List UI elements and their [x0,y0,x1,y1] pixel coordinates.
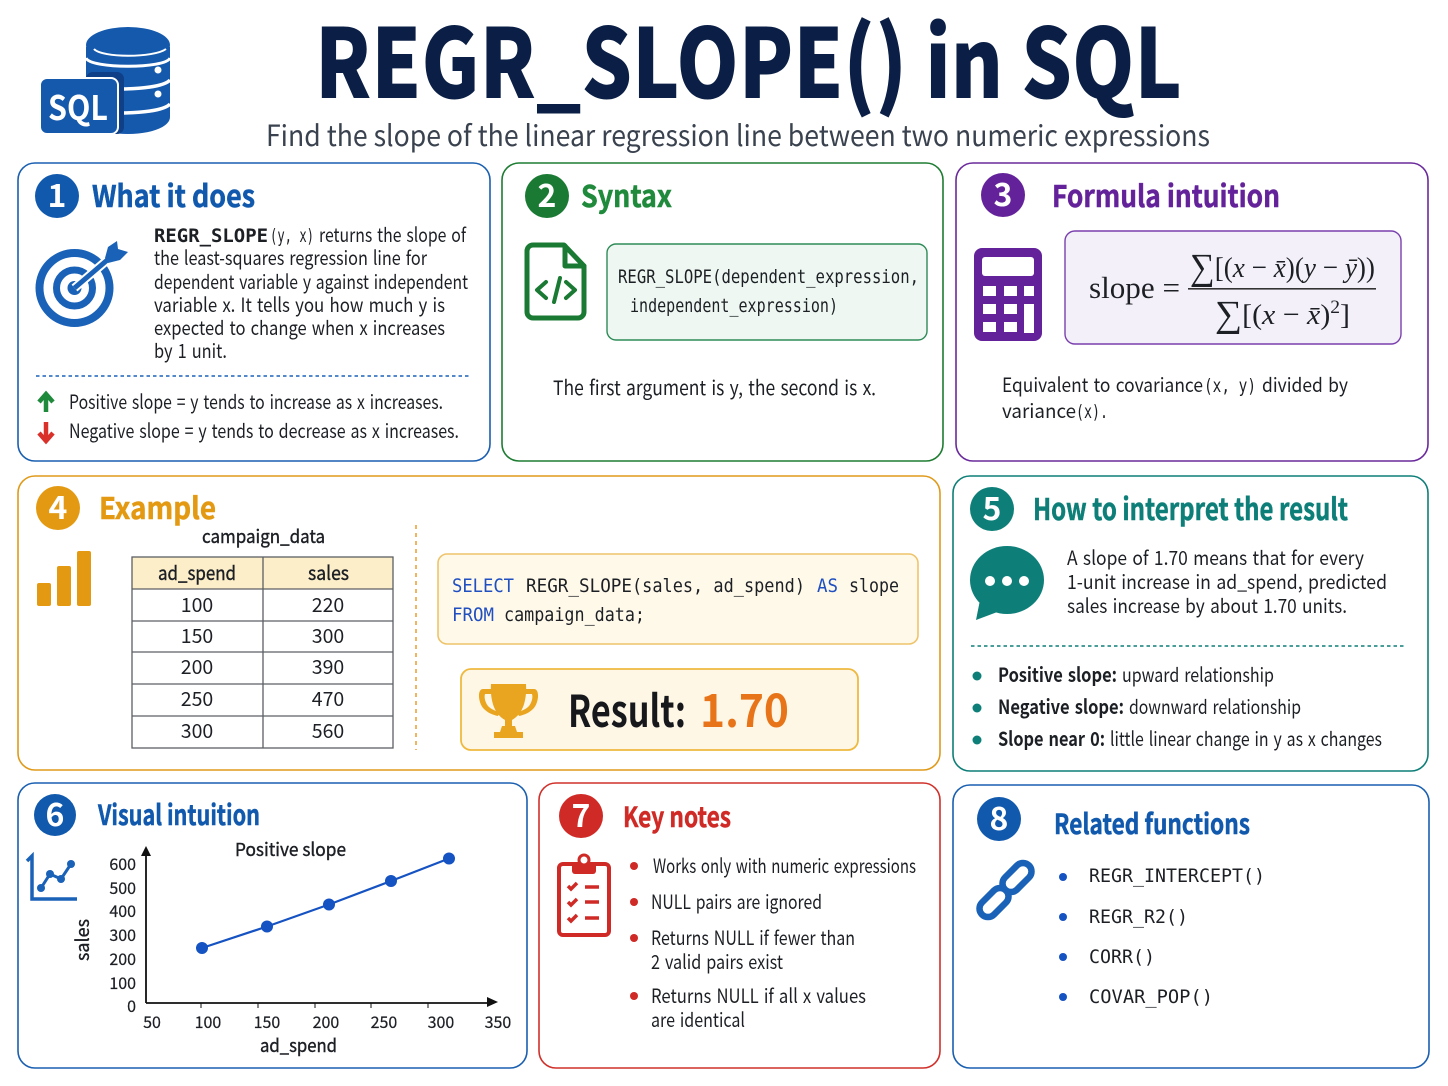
formula caption: (x). [1076,401,1108,423]
panel: Formula intuition [956,163,1428,461]
number badge 4 [36,483,80,530]
heading: Example: Example [99,484,216,528]
formula box: 2 [1330,297,1340,318]
subtitle: Find the slope of the linear regression line between two numeric expressions [266,113,1210,155]
interpretation text: A slope of 1.70 means that for every [1067,542,1364,571]
formula box: x − x̄) [1262,299,1330,331]
heading: Related functions: Related functions [1054,803,1250,843]
y axis labels: 300 [109,922,136,946]
code box: example query: (sales, ad_spend) [632,575,805,597]
bullet list: notes: Returns NULL if fewer than [651,922,855,951]
data series [196,852,455,954]
formula caption: variance [1002,395,1076,424]
interpretation text: sales increase by about 1.70 units. [1067,590,1347,619]
formula box: ] [1340,299,1350,331]
code box: example query: campaign_data; [504,604,645,626]
bullet list: notes: are identical [651,1004,745,1033]
panel: Visual intuition [18,783,527,1068]
code box: example query: slope [849,575,899,597]
number badge 3: 3 [994,170,1012,216]
panel: What it does [18,163,490,461]
x axis labels: 50 [143,1009,161,1033]
data table: 250 [181,683,213,712]
number badge 6: 6 [46,790,64,836]
table title: campaign_data [202,523,325,549]
bullet list: slope meanings: downward relationship [1129,691,1301,720]
formula box: [( [1215,252,1233,284]
icon: SQL database [40,27,170,134]
y axis labels: 100 [109,970,136,994]
code box: syntax: REGR_SLOPE(dependent_expression, [618,266,919,288]
formula box: ∑ [1215,294,1242,335]
bullet list: notes: NULL pairs are ignored [651,886,822,915]
x axis labels: 100 [195,1009,221,1033]
negative slope text: Negative slope = y tends to decrease as x increases. [69,415,459,444]
number badge 7 [559,791,603,838]
icon: checklist clipboard [559,855,609,935]
heading: Formula intuition: Formula intuition [1052,172,1280,216]
heading: Syntax: Syntax [581,172,672,216]
heading: What it does: What it does [92,172,255,216]
heading: Key notes: Key notes [623,796,731,836]
x axis labels: 300 [428,1009,454,1033]
code box: example query: FROM [452,604,494,626]
code box: syntax [607,244,927,340]
code box: example query: SELECT [452,575,514,597]
description text: REGR_SLOPE [154,225,268,247]
bullet list: slope meanings: Negative slope: [998,691,1124,720]
number badge 5 [970,484,1014,531]
code box: example query: REGR_SLOPE [526,575,632,597]
bullet list: slope meanings: upward relationship [1122,659,1274,688]
panel: How to interpret the result [953,476,1428,771]
heading: Visual intuition: Visual intuition [97,794,260,834]
function list: COVAR_POP() [1089,986,1213,1008]
bullet list: notes: Returns NULL if all x values [651,980,866,1009]
x axis labels: 150 [254,1009,280,1033]
formula box: [( [1242,299,1262,331]
formula box [1065,231,1401,344]
icon: trophy [479,684,538,738]
icon: SQL database: SQL [48,81,108,130]
data table: 100 [181,589,213,618]
y axis labels: 200 [109,946,136,970]
icon: speech bubble [970,546,1044,620]
data table: 200 [181,651,213,680]
icon: green up arrow [39,394,53,412]
formula box: slope = [1089,270,1180,305]
x axis labels: 350 [485,1009,511,1033]
description text [154,219,469,364]
function list [1059,865,1265,1008]
y axis labels: 0 [127,993,136,1017]
bullet list: notes: 2 valid pairs exist [651,946,784,975]
data table [132,557,393,748]
number badge 1: 1 [48,171,66,217]
x axis labels: 250 [371,1009,397,1033]
code box: example query: AS [817,575,838,597]
x axis title: ad_spend [260,1032,337,1058]
y axis labels: 500 [109,875,136,899]
data table: 470 [312,683,344,712]
panel: Key notes [539,783,940,1068]
bullet list: slope meanings: little linear change in y as x changes [1110,723,1382,752]
number badge 4: 4 [49,483,67,529]
y axis labels: 600 [109,851,136,875]
description text: (y, x) [270,225,314,247]
panel: Example [18,476,940,770]
icon: target with arrow [40,241,128,323]
data table: 390 [312,651,344,680]
scatter line chart [69,836,511,1058]
icon: chain link [976,859,1035,921]
code box: example query [438,554,918,644]
y axis labels [109,851,136,1017]
bullet list: notes [630,850,916,1033]
icon: red down arrow [39,422,53,441]
syntax caption: The first argument is y, the second is x. [553,372,876,401]
icon: code file [527,245,584,318]
interpretation text: 1-unit increase in ad_spend, predicted [1067,566,1387,595]
number badge 1 [35,171,79,218]
chart title: Positive slope [235,836,346,862]
interpretation text [1067,542,1387,619]
x axis labels [143,1009,511,1033]
result box [461,669,858,750]
panel: Syntax [502,163,943,461]
bullet list: slope meanings: Slope near 0: [998,723,1105,752]
number badge 6 [34,790,76,836]
y axis labels: 400 [109,898,136,922]
bullet list: notes: Works only with numeric expressions [653,850,916,879]
number badge 2 [525,171,569,218]
icon: calculator [974,248,1042,341]
data table: 300 [181,715,213,744]
data table: 220 [312,589,344,618]
function list: REGR_R2() [1089,906,1188,928]
formula caption [1002,369,1348,424]
bullet list: slope meanings: Positive slope: [998,659,1117,688]
icon: line chart [27,856,77,899]
formula caption: divided by [1262,369,1348,398]
data table: 560 [312,715,344,744]
number badge 3 [981,170,1025,217]
formula caption: (x, y) [1204,375,1256,397]
formula box: ∑ [1190,247,1215,288]
description text: expected to change when x increases [154,312,445,341]
formula box: x − x̄)(y − ȳ)) [1233,252,1376,284]
data table: sales [308,559,349,586]
description text: variable x. It tells you how much y is [154,289,445,318]
description text: returns the slope of [319,219,467,248]
data table: ad_spend [158,559,236,586]
description text: the least-squares regression line for [154,242,427,271]
icon: bar chart [37,551,91,606]
description text: dependent variable y against independent [154,266,469,295]
x axis labels: 200 [313,1009,339,1033]
code box: syntax: independent_expression) [630,295,838,317]
number badge 2: 2 [538,171,556,217]
formula caption: Equivalent to covariance [1002,369,1203,398]
data table: 300 [312,620,344,649]
panel: Related functions [953,785,1429,1068]
result box: 1.70 [700,675,789,741]
positive slope text: Positive slope = y tends to increase as x increases. [69,386,443,415]
bullet list: slope meanings [972,659,1382,752]
number badge 5: 5 [983,484,1001,530]
data table: 150 [181,620,213,649]
description text: by 1 unit. [154,335,227,364]
y axis title: sales [69,919,95,961]
function list: CORR() [1089,946,1155,968]
number badge 7: 7 [572,791,590,837]
number badge 8 [977,794,1021,841]
result box: Result: [568,676,686,740]
function list: REGR_INTERCEPT() [1089,865,1265,887]
heading: How to interpret the result: How to interpret the result [1033,485,1348,529]
number badge 8: 8 [990,794,1008,840]
